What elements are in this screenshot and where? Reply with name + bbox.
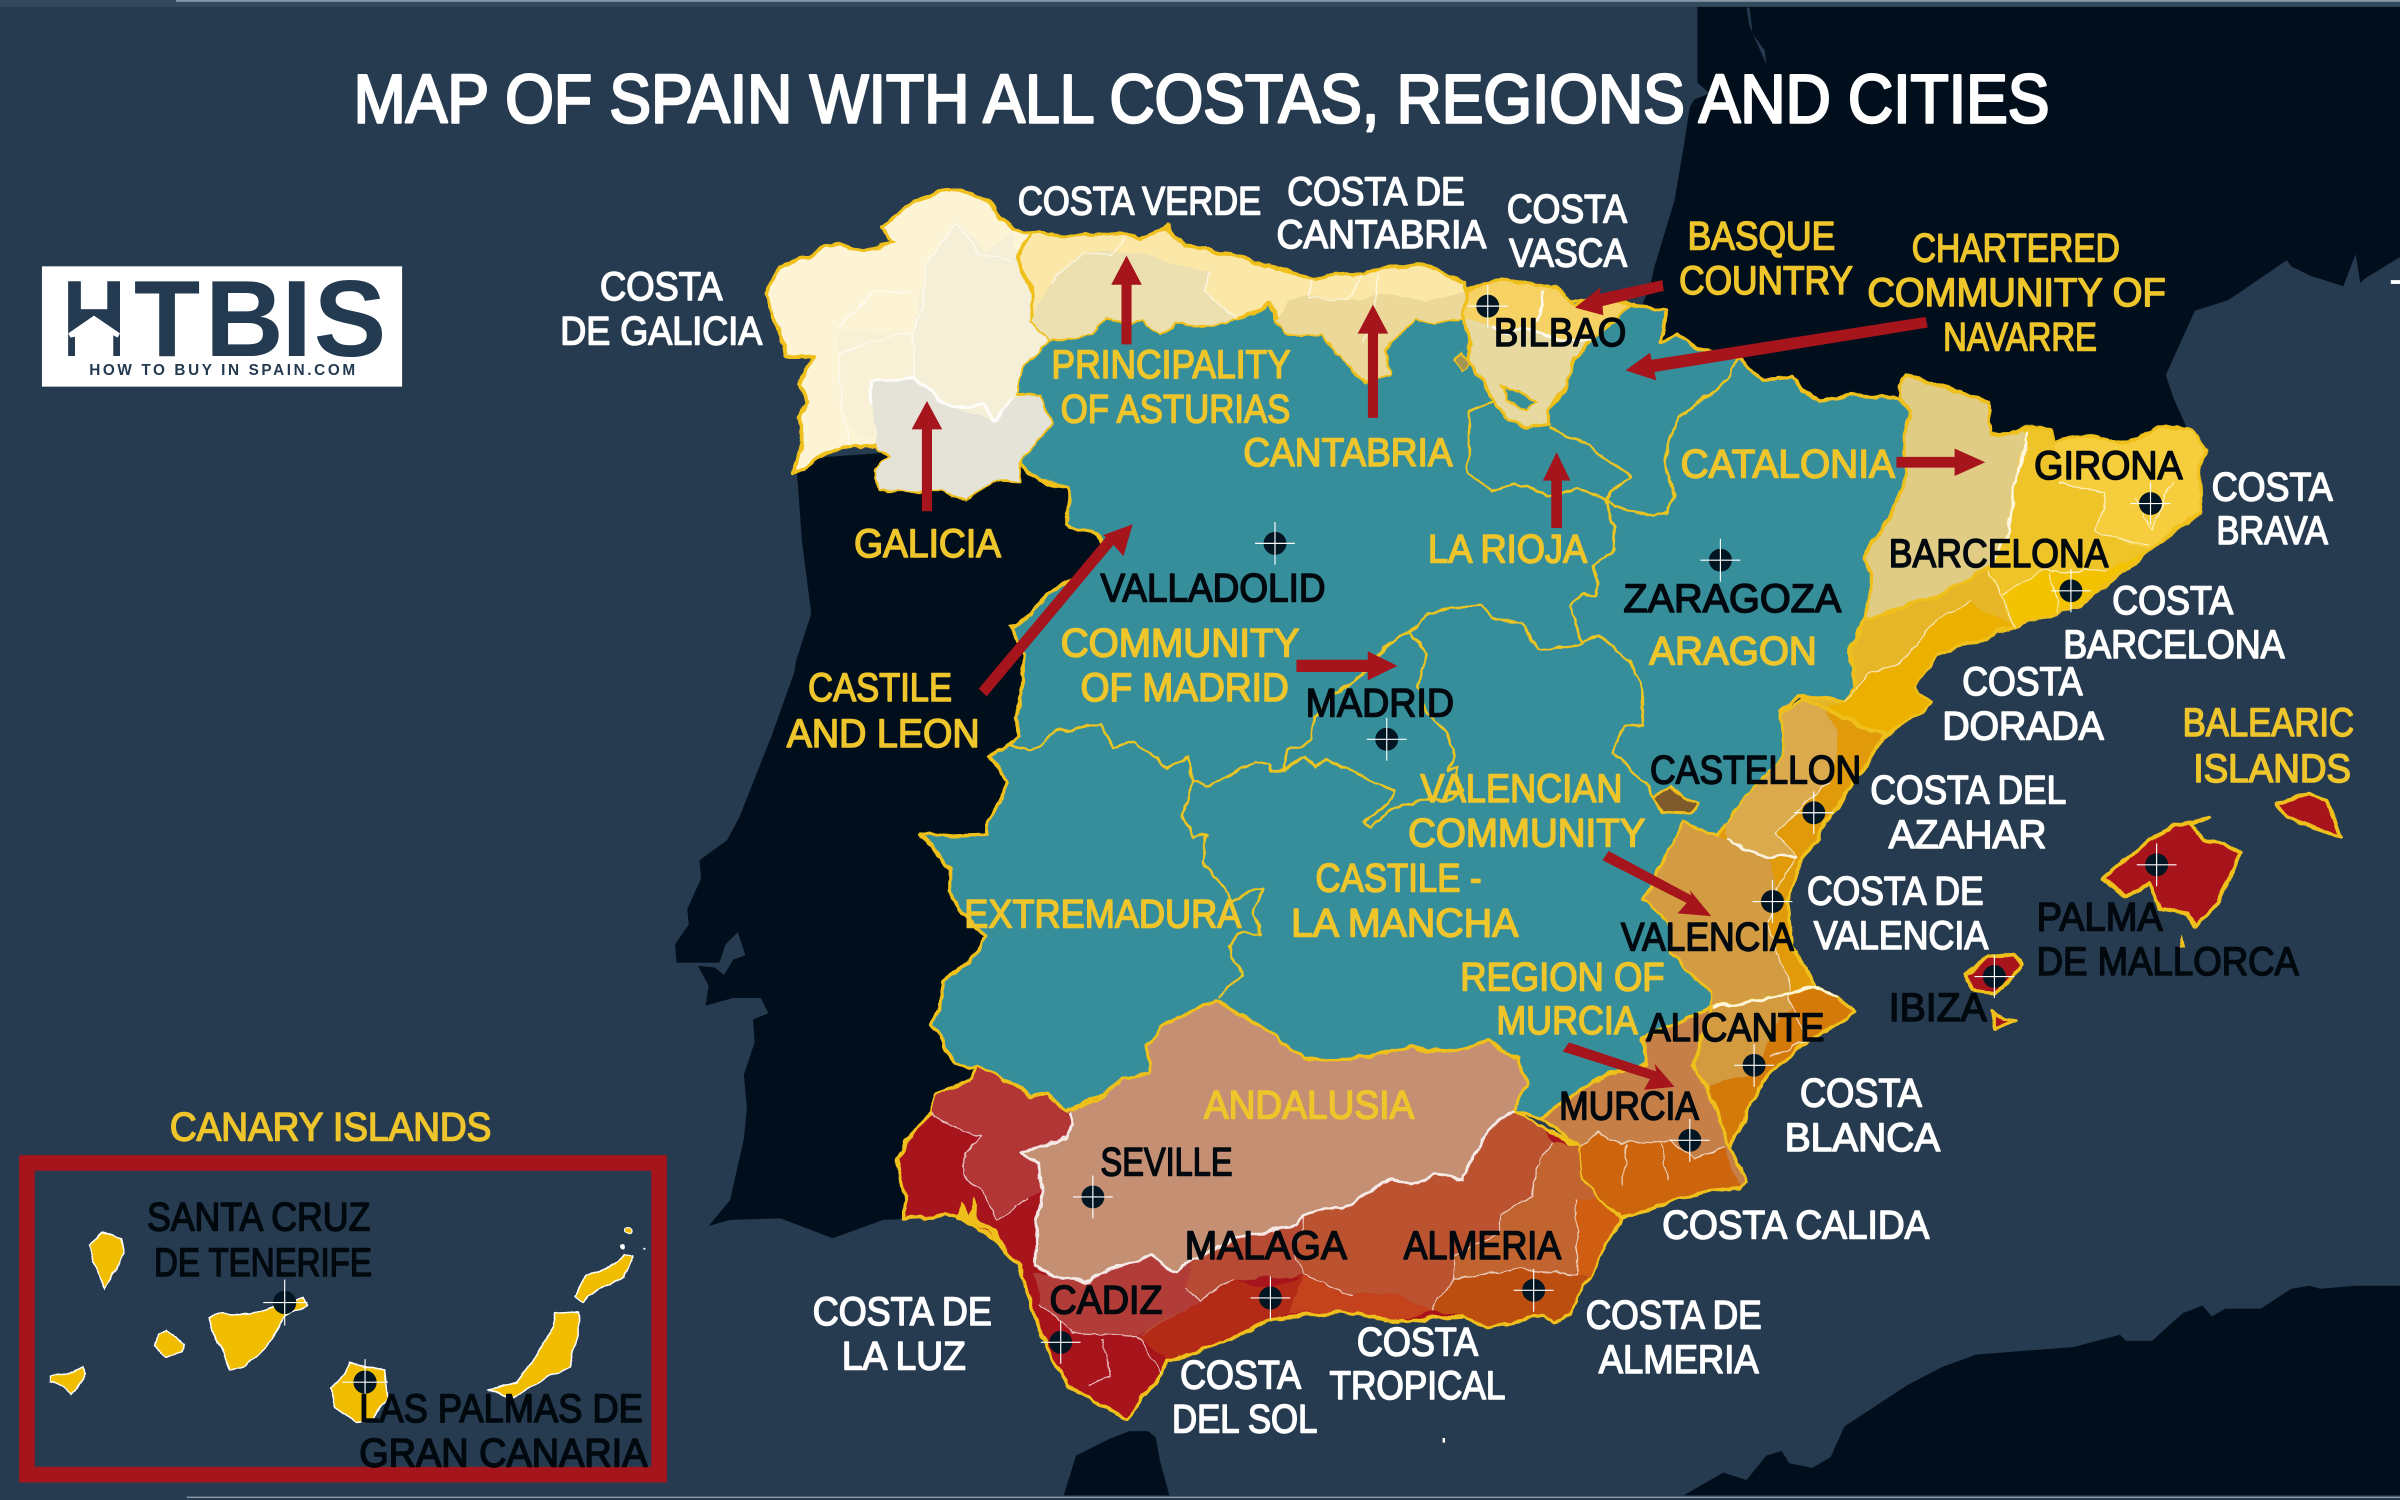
island: Menorca xyxy=(2278,793,2340,837)
land: Portugal xyxy=(675,444,1163,1238)
label: Costa de Galicia: COSTA xyxy=(600,265,723,309)
label: Chartered Community of Navarre: NAVARRE xyxy=(1943,316,2097,360)
label: Community of Madrid: COMMUNITY xyxy=(1061,622,1299,666)
label: Basque Country: COUNTRY xyxy=(1679,259,1853,303)
arrow: Navarre xyxy=(1626,317,1928,380)
island: Lanzarote xyxy=(576,1228,646,1301)
label: Costa Verde: COSTA VERDE xyxy=(1018,179,1261,223)
island: Cabrera xyxy=(2180,934,2186,949)
island: Tenerife xyxy=(208,1298,308,1370)
label: Balearic Islands xyxy=(2183,701,2354,791)
label: Catalonia: CATALONIA xyxy=(1681,443,1895,487)
label: Principality of Asturias xyxy=(1052,343,1291,431)
labels: costas xyxy=(560,170,2333,1442)
arrow: Cantabria xyxy=(1358,305,1388,418)
label: Andalusia: ANDALUSIA xyxy=(1204,1083,1415,1127)
label: Basque Country: BASQUE xyxy=(1688,214,1835,258)
label: Castile and Leon: AND LEON xyxy=(787,712,980,756)
arrow: La Rioja xyxy=(1543,452,1570,528)
label: Costa Dorada xyxy=(1942,660,2104,748)
region: Huelva north xyxy=(931,1067,1073,1220)
land: North Africa xyxy=(1684,1286,2400,1495)
label: Region of Murcia xyxy=(1460,955,1665,1043)
label: Costa de Galicia xyxy=(560,265,763,353)
region: Castellon enclave (Rincon de Ademuz) xyxy=(1653,785,1696,814)
label: Costa Brava: BRAVA xyxy=(2216,509,2328,553)
label: Madrid: MADRID xyxy=(1306,681,1454,725)
label: Costa de Valencia: VALENCIA xyxy=(1814,914,1989,958)
label: Malaga: MALAGA xyxy=(1185,1224,1347,1268)
label: Costa de la Luz: LA LUZ xyxy=(842,1335,966,1379)
region: Asturias and Cantabria coast xyxy=(1016,227,1465,380)
label: Castellon: CASTELLON xyxy=(1650,749,1861,793)
region: Almeria coast xyxy=(1433,1269,1589,1326)
label: Region of Murcia: REGION OF xyxy=(1460,955,1665,999)
label: Valencian Community: COMMUNITY xyxy=(1408,811,1645,855)
title: MAP OF SPAIN WITH ALL COSTAS, REGIONS AND CITIES xyxy=(354,60,2049,137)
label: Costa de Cantabria: CANTABRIA xyxy=(1277,213,1487,257)
label: Balearic Islands: BALEARIC xyxy=(2183,701,2354,745)
label: Costa Blanca: COSTA xyxy=(1800,1072,1922,1116)
label: Costa Vasca: COSTA xyxy=(1507,188,1627,232)
label: Castile and Leon: CASTILE xyxy=(808,666,952,710)
label: Principality of Asturias: OF ASTURIAS xyxy=(1061,387,1290,431)
logo: HTBIS xyxy=(42,259,402,387)
region borders inside the teal area xyxy=(1010,360,1739,998)
label: Castile and Leon xyxy=(787,666,980,756)
region: interior Andalusia xyxy=(1021,999,1526,1281)
island: Fuerteventura xyxy=(488,1312,579,1399)
label: Las Palmas de Gran Canaria: LAS PALMAS DE xyxy=(359,1387,643,1431)
top edge strip xyxy=(0,0,2400,7)
label: Cadiz: CADIZ xyxy=(1050,1278,1163,1322)
label: Valladolid: VALLADOLID xyxy=(1101,567,1326,611)
label: La Rioja: LA RIOJA xyxy=(1428,528,1588,572)
label: Palma de Mallorca: DE MALLORCA xyxy=(2037,940,2299,984)
inset frame xyxy=(27,1163,659,1475)
label: Costa Brava: COSTA xyxy=(2212,466,2333,510)
arrow: Catalonia xyxy=(1896,448,1985,476)
island: El Hierro xyxy=(51,1367,86,1394)
marker: Santa Cruz de Tenerife xyxy=(263,1280,308,1326)
label: Costa de Cantabria xyxy=(1277,170,1487,257)
label: Costa del Sol: DEL SOL xyxy=(1172,1398,1317,1442)
region: Andalusia xyxy=(897,999,1621,1417)
bay of Huelva yellow inlet xyxy=(957,1197,1010,1252)
label: Palma de Mallorca: PALMA xyxy=(2037,896,2163,940)
arrow: Murcia xyxy=(1563,1042,1674,1090)
label: Castile-La Mancha: LA MANCHA xyxy=(1291,902,1519,946)
label: Barcelona: BARCELONA xyxy=(1889,532,2109,576)
region: Tarragona xyxy=(1798,566,2016,736)
label: Ibiza: IBIZA xyxy=(1889,986,1987,1030)
region: Almeria east strip xyxy=(1577,1198,1619,1277)
marker: Las Palmas de Gran Canaria xyxy=(342,1359,388,1405)
logo: HTBIS: H xyxy=(62,259,126,380)
arrow: Valencia xyxy=(1603,851,1711,916)
label: Community of Madrid: OF MADRID xyxy=(1081,666,1289,710)
land: Ceuta headland xyxy=(1064,1431,1169,1495)
label: Chartered Community of Navarre: COMMUNITY OF xyxy=(1867,271,2166,315)
region: Valencian Community xyxy=(1644,699,1884,1149)
label: Costa de la Luz: COSTA DE xyxy=(813,1290,992,1334)
label: Costa de la Luz xyxy=(813,1290,992,1379)
region: Alicante xyxy=(1693,987,1854,1149)
label: Costa Vasca xyxy=(1507,188,1627,275)
label: Seville: SEVILLE xyxy=(1101,1141,1233,1185)
label: Chartered Community of Navarre: CHARTERED xyxy=(1912,227,2120,271)
label: Santa Cruz de Tenerife: SANTA CRUZ xyxy=(147,1196,370,1240)
label: Almeria: ALMERIA xyxy=(1404,1224,1562,1268)
label: Costa del Sol: COSTA xyxy=(1180,1353,1301,1397)
label: Costa Blanca: BLANCA xyxy=(1785,1116,1941,1160)
label: Bilbao: BILBAO xyxy=(1494,311,1626,355)
label: Murcia: MURCIA xyxy=(1559,1084,1699,1128)
label: Palma de Mallorca xyxy=(2037,896,2299,984)
label: Aragon: ARAGON xyxy=(1649,629,1817,673)
label: Costa de Almeria xyxy=(1586,1294,1762,1382)
label: Valencian Community: VALENCIAN xyxy=(1420,767,1622,811)
arrow: Galicia xyxy=(912,401,942,511)
region: Almeria inland xyxy=(1453,1140,1596,1280)
region: Granada xyxy=(1296,1113,1552,1312)
label: Costa Tropical xyxy=(1329,1321,1506,1408)
region: Basque Country xyxy=(1453,279,1629,429)
label: Costa del Azahar: AZAHAR xyxy=(1889,813,2046,857)
region: Catalonia xyxy=(1798,375,2206,736)
logo: HTBIS: HOW TO BUY IN SPAIN.COM xyxy=(89,362,355,379)
label: Costa de Almeria: ALMERIA xyxy=(1599,1338,1759,1382)
arrow: Madrid xyxy=(1296,651,1397,680)
island: Ibiza xyxy=(1965,954,2022,993)
label: Costa del Azahar: COSTA DEL xyxy=(1870,769,2066,813)
label: Principality of Asturias: PRINCIPALITY xyxy=(1052,343,1291,387)
heading: Canary Islands: CANARY ISLANDS xyxy=(170,1105,491,1149)
labels: cities xyxy=(1050,311,2299,1322)
label: Chartered Community of Navarre xyxy=(1867,227,2166,360)
region: Malaga xyxy=(1137,1217,1303,1339)
label: Santa Cruz de Tenerife: DE TENERIFE xyxy=(154,1241,372,1285)
label: Alicante: ALICANTE xyxy=(1646,1006,1824,1050)
island: Formentera xyxy=(1993,1010,2016,1029)
label: Costa del Azahar xyxy=(1870,769,2066,857)
small islet marks xyxy=(1443,280,2400,1443)
city markers xyxy=(1041,285,2177,1364)
land: France and Pyrenees xyxy=(1622,6,2400,459)
labels: regions xyxy=(787,214,2354,1127)
label: Costa de Almeria: COSTA DE xyxy=(1586,1294,1762,1338)
label: Galicia: GALICIA xyxy=(854,522,1001,566)
label: Region of Murcia: MURCIA xyxy=(1496,999,1638,1043)
label: Extremadura: EXTREMADURA xyxy=(964,893,1242,937)
label: Costa de Cantabria: COSTA DE xyxy=(1287,170,1465,214)
label: Costa Barcelona: COSTA xyxy=(2112,579,2234,623)
island: Mallorca xyxy=(2103,817,2241,926)
label: Las Palmas de Gran Canaria xyxy=(359,1387,648,1475)
islands group xyxy=(51,1228,646,1422)
label: Santa Cruz de Tenerife xyxy=(147,1196,372,1285)
label: Costa Blanca xyxy=(1785,1072,1941,1160)
label: Girona: GIRONA xyxy=(2034,444,2183,488)
logo: HTBIS: TBIS xyxy=(134,259,386,380)
panel: mainland Spain map xyxy=(767,190,2206,1417)
region: Galicia xyxy=(767,190,1052,501)
label: Costa de Valencia: COSTA DE xyxy=(1807,870,1984,914)
label: Costa de Valencia xyxy=(1807,870,1989,958)
region: Murcia xyxy=(1540,1007,1746,1220)
panel: Canary Islands inset xyxy=(27,1105,659,1475)
label: Costa Brava xyxy=(2212,466,2333,553)
island: La Gomera xyxy=(155,1330,184,1358)
arrow: Basque Country xyxy=(1575,280,1664,315)
label: Costa Calida: COSTA CALIDA xyxy=(1662,1203,1930,1247)
label: Balearic Islands: ISLANDS xyxy=(2193,747,2351,791)
label: Zaragoza: ZARAGOZA xyxy=(1623,577,1842,621)
label: Costa Tropical: TROPICAL xyxy=(1329,1364,1506,1408)
label: Costa del Sol xyxy=(1172,1353,1317,1442)
island: Gran Canaria xyxy=(331,1362,387,1422)
label: Valencian Community xyxy=(1408,767,1645,855)
bottom edge strip xyxy=(0,1495,2400,1500)
label: Costa Vasca: VASCA xyxy=(1509,231,1627,275)
region: interior teal (Castile and Leon, Madrid, Castile-La Mancha, Extremadura, Aragon, Navarre, La Rioja) xyxy=(921,291,1910,1224)
region: Granada coast xyxy=(1289,1277,1433,1319)
arrow: Castile and Leon xyxy=(979,524,1133,696)
label: Costa Barcelona: BARCELONA xyxy=(2063,623,2285,667)
label: Costa de Galicia: DE GALICIA xyxy=(560,309,763,353)
label: Costa Dorada: DORADA xyxy=(1942,704,2104,748)
label: Las Palmas de Gran Canaria: GRAN CANARIA xyxy=(359,1431,648,1475)
arrow: Asturias xyxy=(1111,256,1142,344)
label: Costa Dorada: COSTA xyxy=(1962,660,2083,704)
label: Community of Madrid xyxy=(1061,622,1299,710)
label: Valencia: VALENCIA xyxy=(1621,916,1794,960)
island: La Palma xyxy=(89,1232,124,1289)
label: Castile-La Mancha xyxy=(1291,857,1519,946)
region: Cadiz xyxy=(1035,1255,1200,1336)
label: Costa Barcelona xyxy=(2063,579,2285,667)
label: Cantabria: CANTABRIA xyxy=(1243,431,1453,475)
panel: Balearic Islands xyxy=(1965,793,2340,1029)
label: Castile-La Mancha: CASTILE - xyxy=(1316,857,1482,901)
label: Basque Country xyxy=(1679,214,1853,303)
label: Costa Tropical: COSTA xyxy=(1357,1321,1479,1365)
